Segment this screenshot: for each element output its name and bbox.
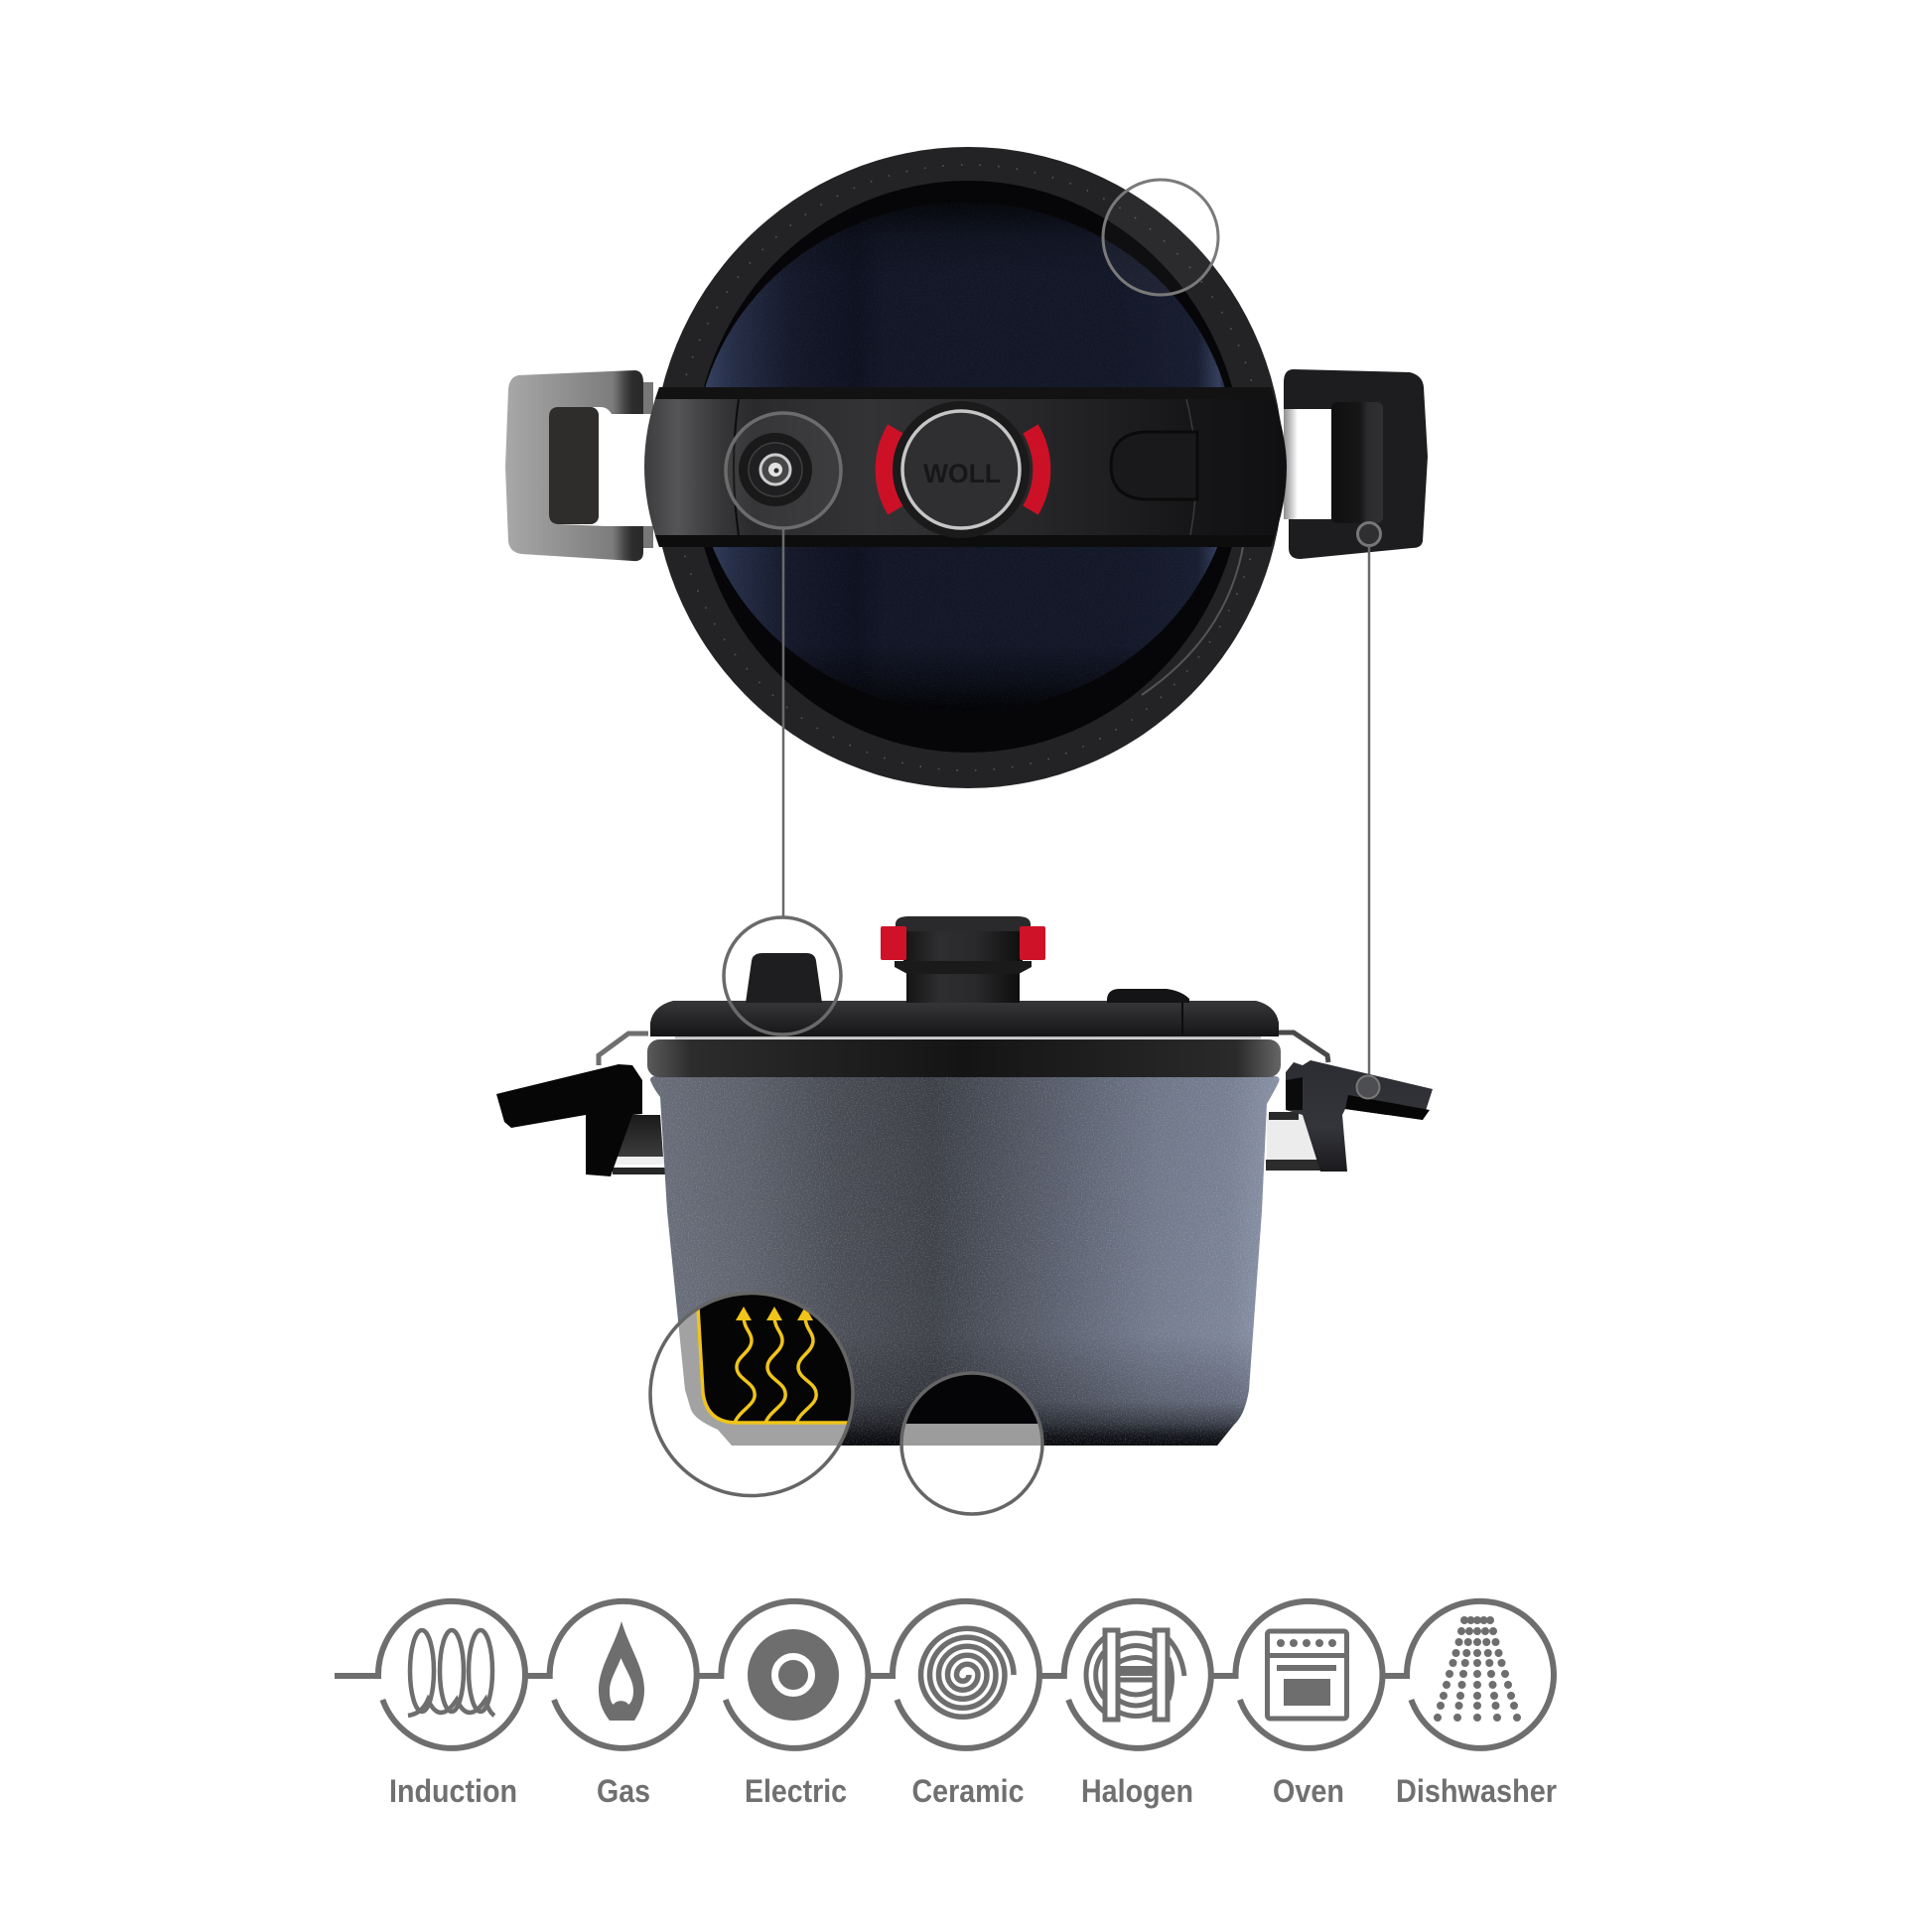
- label: Dishwasher: Dishwasher: [1396, 1773, 1557, 1809]
- panel: pot seen from above: [505, 147, 1428, 788]
- left side handle: [496, 1034, 665, 1176]
- left handle (top view): [505, 370, 653, 561]
- label: Oven: Oven: [1273, 1773, 1344, 1809]
- icon: oven: [1212, 1601, 1382, 1748]
- heat arrow 1: [735, 1307, 755, 1423]
- callout: base cross section: [898, 1370, 1045, 1514]
- icon: ceramic spiral: [869, 1601, 1039, 1748]
- label: Ceramic: Ceramic: [911, 1773, 1025, 1809]
- lid rim ring: [652, 147, 1284, 788]
- panel: pot side view: [496, 916, 1433, 1514]
- label: Halogen: Halogen: [1081, 1773, 1193, 1809]
- right side handle: [1266, 1033, 1433, 1172]
- heat arrow 2: [765, 1307, 785, 1423]
- slider button side: [1107, 989, 1189, 1003]
- lid locking band: [644, 387, 1287, 547]
- icon: dishwasher spray: [1384, 1601, 1554, 1748]
- icon: electric hotplate: [698, 1601, 868, 1748]
- label: Gas: Gas: [597, 1773, 650, 1809]
- icon: induction: [335, 1601, 525, 1748]
- WOLL logo: WOLL: [923, 459, 1001, 488]
- callout circle: valve: [726, 413, 841, 528]
- callout circle: rim detail: [1103, 180, 1218, 295]
- label: Electric: Electric: [745, 1773, 847, 1809]
- lid top: [650, 1001, 1279, 1036]
- callout circle: valve on lid: [724, 917, 841, 1035]
- pressure valve side: [746, 953, 822, 1003]
- central WOLL knob: [893, 401, 1030, 538]
- pressure valve (top view): [739, 433, 812, 506]
- callout circle: handle end: [1356, 1076, 1380, 1098]
- red pressure indicators: [885, 429, 1041, 510]
- heat arrow 3: [796, 1307, 816, 1423]
- callout circle: handle: [1358, 522, 1380, 546]
- lid rim: [647, 1036, 1281, 1077]
- callout: cross section with heat arrows: [648, 1291, 855, 1497]
- icon: halogen: [1040, 1601, 1211, 1748]
- right handle (top view): [1284, 369, 1428, 559]
- panel: hob compatibility icons: [335, 1601, 1557, 1809]
- icon: gas flame: [526, 1601, 697, 1748]
- connector line: handle: [1368, 546, 1370, 1075]
- connector line: valve: [782, 529, 784, 918]
- inner pot surface: [695, 199, 1241, 715]
- pot body: [645, 1076, 1286, 1446]
- pressure knob with red indicators: [881, 916, 1045, 1003]
- slider button: [1111, 432, 1197, 499]
- label: Induction: Induction: [389, 1773, 517, 1809]
